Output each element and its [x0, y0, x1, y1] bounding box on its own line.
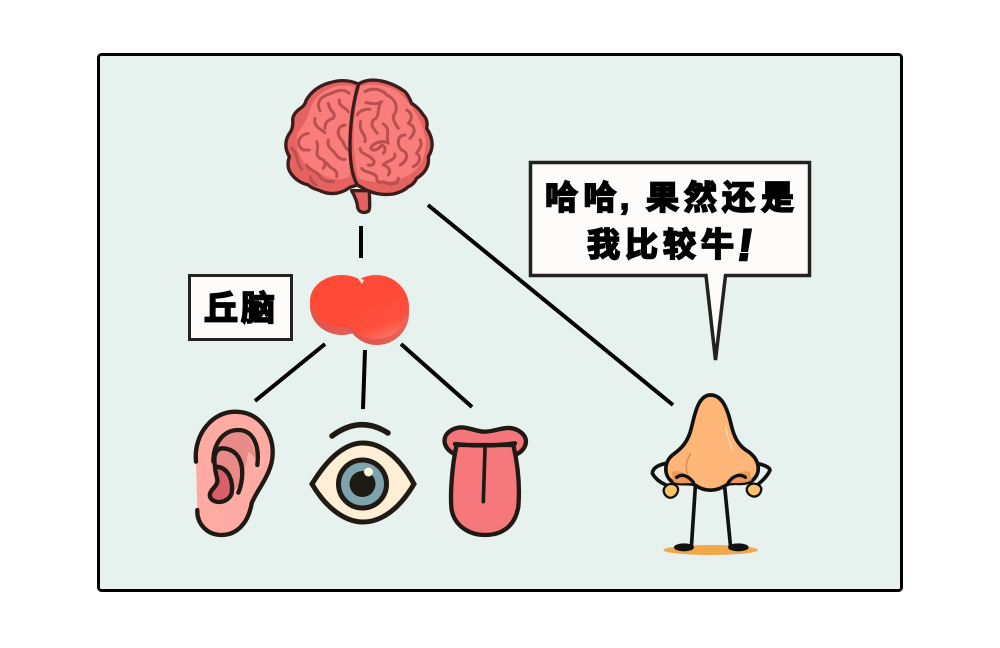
- iris: [338, 460, 386, 508]
- exclamation mark: !: [735, 221, 756, 270]
- icon: brain: [286, 80, 432, 212]
- panel: background frame: [98, 54, 902, 590]
- connector: thalamus to tongue: [401, 344, 472, 407]
- right nostril: [728, 475, 745, 482]
- ear inner shade: [215, 431, 256, 492]
- connector: brain to thalamus: [359, 226, 363, 258]
- left nostril: [677, 475, 693, 482]
- ear helix: [213, 430, 258, 465]
- pupil: [350, 471, 376, 497]
- brain stem: [352, 191, 370, 212]
- thalamus left rim: [310, 277, 374, 335]
- nose crease: [686, 453, 691, 473]
- left arm: [652, 463, 666, 485]
- speech bubble: [530, 162, 810, 360]
- icon: tongue: [445, 427, 526, 535]
- brain highlight: right lobe: [354, 84, 426, 182]
- label box: [190, 276, 292, 340]
- left leg: [691, 487, 695, 548]
- tongue top: [445, 427, 526, 455]
- tongue body: [451, 445, 519, 535]
- brain midline: [350, 85, 358, 185]
- ground shadow: [663, 545, 758, 555]
- thalamus left lobe: [310, 275, 374, 327]
- right nostril shade: [728, 471, 752, 483]
- brain folds: [292, 89, 421, 185]
- icon: eye: [312, 425, 414, 522]
- bubble shape: [530, 162, 810, 360]
- connector: brain to nose: [428, 205, 673, 405]
- left foot: [674, 543, 694, 551]
- right arm: [757, 463, 770, 485]
- ear outline: [196, 412, 273, 535]
- thalamus notch: [357, 277, 364, 284]
- eye outline: [312, 443, 414, 522]
- left hand: [664, 484, 678, 498]
- connector: thalamus to ear: [255, 344, 325, 401]
- eye glint: [364, 468, 373, 476]
- label: thalamus: [190, 276, 292, 340]
- brain outline: [286, 80, 432, 194]
- right hand: [747, 484, 761, 497]
- left nostril shade: [672, 471, 693, 483]
- icon: thalamus: [310, 275, 409, 345]
- bubble text line 2: 我比较牛: [587, 226, 734, 263]
- tongue crossbar: [455, 443, 515, 446]
- thalamus right lobe: [343, 275, 409, 339]
- bubble text line 1: 哈哈,果然还是: [545, 179, 794, 216]
- brain highlight: left lobe: [297, 86, 355, 179]
- nose body: [666, 395, 758, 490]
- tongue centre line: [483, 448, 485, 502]
- character: nose: [652, 395, 770, 555]
- icon: ear: [196, 412, 273, 535]
- label text: 丘脑: [204, 290, 275, 328]
- connector: thalamus to eye: [363, 350, 365, 409]
- thalamus right rim: [345, 281, 409, 345]
- eyebrow: [332, 425, 388, 436]
- nose highlight: [725, 427, 732, 450]
- ear antihelix: [214, 448, 242, 493]
- ear lobe cavity: [210, 467, 232, 502]
- right leg: [725, 487, 731, 548]
- right foot: [728, 543, 749, 551]
